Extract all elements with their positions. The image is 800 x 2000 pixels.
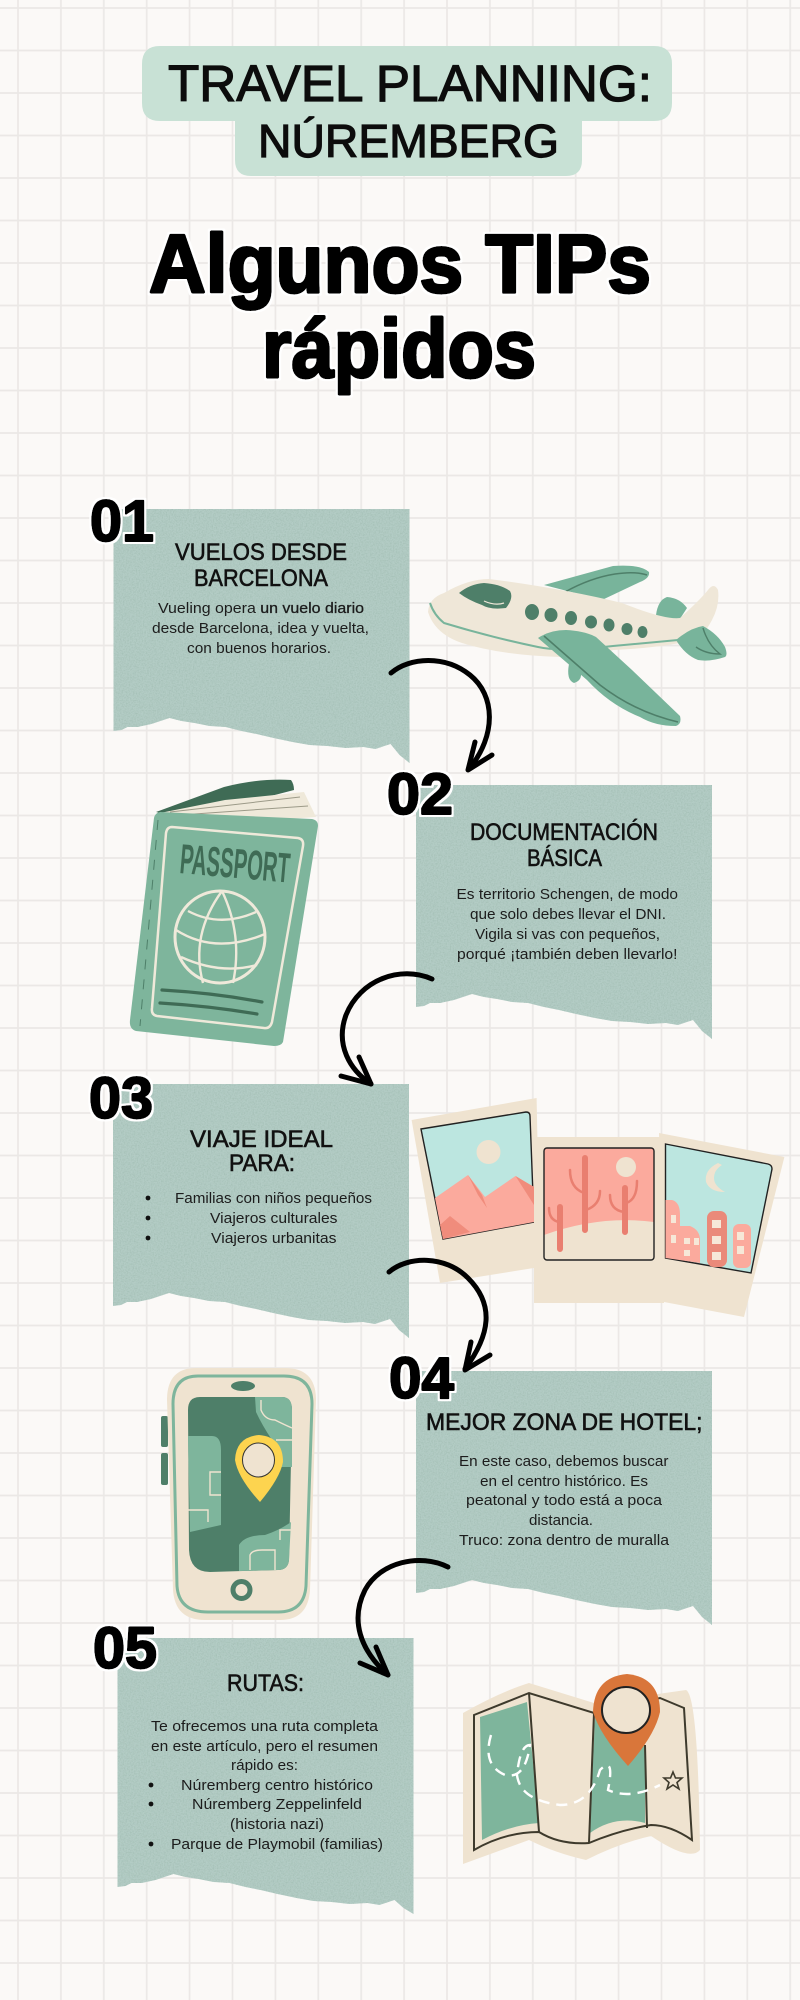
heading line 1: Algunos TIPs: [149, 217, 651, 310]
number 01: 01: [90, 489, 154, 554]
card bullet list: Viajeros culturales: [210, 1210, 338, 1227]
card body text: Truco: zona dentro de muralla: [459, 1532, 670, 1549]
torn paper card: [113, 1084, 409, 1338]
card body text: peatonal y todo está a poca: [466, 1492, 663, 1509]
title banner: [142, 46, 672, 176]
card body text: (historia nazi): [230, 1816, 324, 1833]
photo: mountains: [412, 1098, 540, 1283]
card body text: porqué ¡también deben llevarlo!: [457, 946, 678, 963]
card body text: distancia.: [529, 1512, 593, 1529]
card body text: rápido es:: [231, 1757, 298, 1774]
torn paper card: [416, 785, 712, 1039]
card body text: Es territorio Schengen, de modo: [456, 886, 678, 903]
card bullet list: Viajeros urbanitas: [211, 1230, 336, 1247]
icon: folded map with pin: [463, 1674, 700, 1864]
icon: passport: PASSPORT: [178, 835, 292, 892]
card heading: BARCELONA: [194, 565, 328, 592]
card heading: [470, 819, 658, 872]
title line 2: NÚREMBERG: [258, 115, 559, 167]
card heading: [175, 539, 347, 592]
icon: phone with map: [161, 1368, 316, 1620]
card body text: que solo debes llevar el DNI.: [470, 906, 666, 923]
arrow: 04 to 05: [358, 1560, 448, 1675]
number 02: 02: [387, 762, 453, 827]
card body text: Vigila si vas con pequeños,: [475, 926, 660, 943]
card body text: [459, 1453, 670, 1549]
number 03: 03: [89, 1066, 153, 1131]
card body text: en el centro histórico. Es: [480, 1473, 648, 1490]
number 05: 05: [93, 1616, 157, 1681]
card heading: BÁSICA: [527, 845, 602, 872]
photo: cactus: [534, 1137, 664, 1303]
arrow: 01 to 02: [391, 660, 492, 770]
card heading: RUTAS:: [227, 1670, 304, 1697]
torn paper card: [416, 1371, 712, 1625]
card body text: [456, 886, 678, 963]
card body text: en este artículo, pero el resumen: [151, 1738, 378, 1755]
arrow: 02 to 03: [341, 974, 432, 1084]
card body text: desde Barcelona, idea y vuelta,: [152, 620, 369, 637]
map pin orange: [593, 1674, 660, 1766]
card body text: [152, 600, 369, 657]
banner pill shape: [142, 46, 672, 176]
card heading: PARA:: [229, 1150, 295, 1177]
card body text: En este caso, debemos buscar: [459, 1453, 669, 1470]
heading line 2: rápidos: [262, 302, 536, 395]
panel: 01 vuelos: [90, 489, 410, 763]
card body text: Núremberg centro histórico: [181, 1777, 373, 1794]
card body text: Vueling opera un vuelo diario: [158, 600, 364, 617]
title line 1: TRAVEL PLANNING:: [168, 55, 652, 112]
panel: 02 documentacion: [387, 762, 712, 1039]
card bullet list: [146, 1190, 372, 1247]
card body text: [149, 1718, 383, 1853]
icon: airplane: [428, 566, 726, 726]
icon: three photos: [412, 1098, 784, 1317]
card heading: DOCUMENTACIÓN: [470, 819, 658, 846]
star mark: [664, 1772, 682, 1789]
torn paper card: [118, 1638, 414, 1914]
icon: passport: [130, 780, 318, 1046]
torn paper card: [114, 509, 410, 763]
card body text: Núremberg Zeppelinfeld: [192, 1796, 362, 1813]
map pin yellow: [235, 1435, 283, 1502]
arrow: 03 to 04: [389, 1260, 490, 1370]
card body text: Parque de Playmobil (familias): [171, 1836, 383, 1853]
panel: 03 viaje ideal: [89, 1066, 409, 1338]
main heading: [149, 217, 651, 395]
number 04: 04: [389, 1346, 454, 1411]
panel: 05 rutas: [93, 1616, 414, 1914]
card heading: VUELOS DESDE: [175, 539, 347, 566]
card bullet list: Familias con niños pequeños: [175, 1190, 372, 1207]
photo: city: [659, 1133, 784, 1317]
panel: 04 zona de hotel: [389, 1346, 712, 1625]
card heading: MEJOR ZONA DE HOTEL;: [426, 1409, 702, 1436]
card heading: [190, 1126, 333, 1177]
card body text: Te ofrecemos una ruta completa: [151, 1718, 379, 1735]
card body text: con buenos horarios.: [187, 640, 331, 657]
card heading: VIAJE IDEAL: [190, 1126, 333, 1153]
